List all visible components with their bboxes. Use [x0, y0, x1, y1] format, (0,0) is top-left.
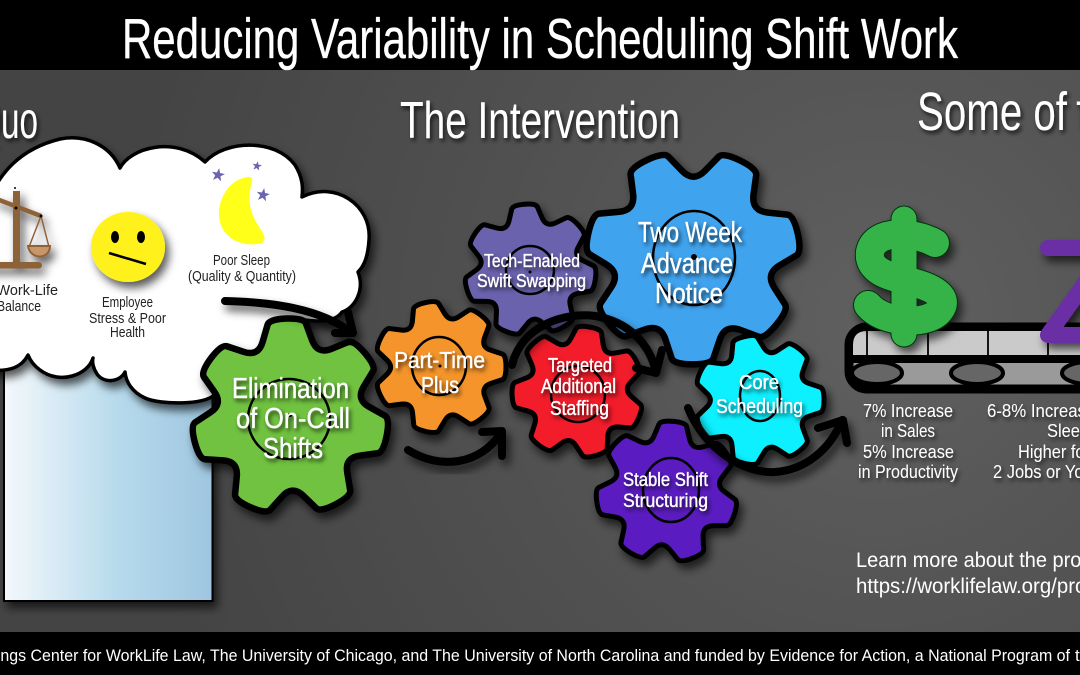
icon: neutral face — [91, 212, 165, 282]
label: employee stress: Health — [110, 324, 145, 341]
icon: moon and stars — [210, 160, 271, 244]
label: poor sleep: Poor Sleep — [213, 252, 270, 269]
gear: stable shift structuring: Stable Shift — [623, 470, 709, 491]
label: poor sleep: (Quality & Quantity) — [188, 268, 296, 285]
panel: cloud of status quo problems — [0, 138, 369, 403]
gear: elimination of on-call shifts — [189, 315, 391, 514]
label: work-life balance — [0, 282, 58, 315]
cloud shape — [0, 138, 369, 403]
gear: targeted additional staffing: Targeted — [548, 355, 612, 377]
footer bar with credits — [0, 632, 1080, 675]
gear: tech-enabled swift swapping: Swift Swapping — [477, 271, 586, 291]
gear: core scheduling: Core — [739, 372, 779, 394]
gear: elimination of on-call shifts: Elimination — [232, 373, 349, 405]
heading: the intervention: The Intervention — [400, 92, 680, 150]
gear: targeted additional staffing — [503, 316, 654, 465]
gear: core scheduling — [682, 322, 836, 475]
label: poor sleep — [188, 252, 296, 285]
arrow: cloud to green gear — [225, 301, 353, 333]
text: sales and productivity benefit: 5% Increase — [863, 442, 954, 462]
icon: letter z for sleep — [1048, 248, 1080, 335]
gear: part-time plus — [361, 288, 518, 443]
gear: part-time plus: Plus — [421, 372, 459, 398]
gear: tech-enabled swift swapping — [459, 199, 601, 338]
gear: two week advance notice: Notice — [655, 278, 723, 310]
icon: dollar sign — [868, 219, 943, 334]
text: sales and productivity benefit: in Productivity — [858, 462, 958, 482]
panel: gradient box below cloud — [4, 350, 212, 601]
gear: elimination of on-call shifts: Shifts — [263, 433, 323, 465]
gear: part-time plus: Part-Time — [394, 347, 485, 373]
text: sales and productivity benefit: 7% Increase — [863, 401, 953, 421]
text: sales and productivity benefit: in Sales — [881, 421, 935, 441]
text: sleep benefit — [987, 401, 1080, 482]
icon: balance scale — [0, 187, 50, 268]
gear: tech-enabled swift swapping: Tech-Enabled — [484, 251, 580, 271]
gear: stable shift structuring: Structuring — [623, 491, 708, 512]
gear: targeted additional staffing: Staffing — [550, 398, 609, 420]
gear: elimination of on-call shifts: of On-Call — [236, 403, 350, 435]
arrow: arc over red gear — [512, 315, 662, 373]
gear: two week advance notice: Two Week — [638, 217, 742, 249]
gear: targeted additional staffing: Additional — [541, 376, 616, 398]
label: employee stress: Stress & Poor — [89, 310, 166, 327]
arrow: orange gear to red gear — [408, 431, 502, 462]
gear: core scheduling: Scheduling — [716, 396, 803, 418]
arrow: under core scheduling gear — [688, 408, 847, 472]
gear: stable shift structuring — [591, 415, 743, 565]
gear: two week advance notice — [553, 114, 836, 395]
label: employee stress — [89, 294, 166, 341]
gear: two week advance notice: Advance — [641, 248, 733, 280]
icon: conveyor belt — [848, 327, 1080, 389]
header bar with title — [0, 0, 1080, 71]
text: learn more link — [856, 549, 1080, 598]
text: sales and productivity benefit — [858, 401, 958, 482]
label: employee stress: Employee — [102, 294, 153, 311]
